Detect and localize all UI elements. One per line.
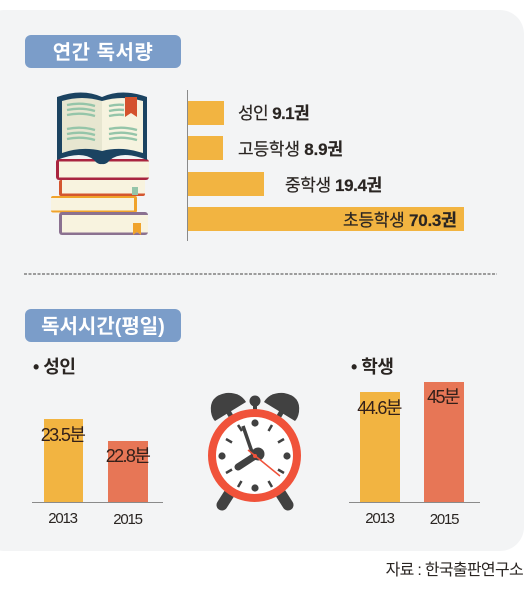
bar: students 2015: 45분 <box>427 387 460 407</box>
icon: books stack with open book <box>51 92 149 235</box>
subheading: students: • 학생 <box>351 357 393 377</box>
bar: high school <box>188 136 343 160</box>
subheading: adults: • 성인 <box>33 357 75 377</box>
bar: adults 2013: 2013 <box>48 510 78 527</box>
heading: annual reading: 연간 독서량 <box>53 41 153 64</box>
book: top red <box>56 159 149 180</box>
bar: middle school: 중학생 19.4권 <box>285 176 382 195</box>
bar chart: students <box>349 382 480 528</box>
book: purple <box>59 212 148 235</box>
heading: reading time on weekdays <box>25 309 181 342</box>
bar: adults 2015: 22.8분 <box>106 446 150 466</box>
icon: alarm clock <box>211 393 299 505</box>
bar: elementary: 초등학생 70.3권 <box>343 211 457 230</box>
heading: reading time on weekdays: 독서시간(평일) <box>41 315 165 338</box>
bar: adults 2015: 2015 <box>113 511 143 528</box>
heading: annual reading <box>25 35 181 68</box>
bar: students 2013: 2013 <box>365 510 395 527</box>
bar: adults 2013: 23.5분 <box>41 425 85 445</box>
bar: students 2015: 2015 <box>430 511 459 528</box>
book: orange-red <box>59 180 145 196</box>
bar chart: annual reading <box>187 90 464 241</box>
bar: adults 2013 <box>41 419 85 527</box>
bar: students 2013 <box>357 392 402 527</box>
source note: 자료 : 한국출판연구소 <box>386 561 523 579</box>
bar: students 2015 <box>424 382 464 528</box>
book: yellow <box>51 196 137 212</box>
bar: high school: 고등학생 8.9권 <box>238 140 343 159</box>
bar: students 2013: 44.6분 <box>357 398 402 418</box>
bar: elementary <box>188 207 464 231</box>
book: open navy <box>57 92 147 164</box>
bar: adult: 성인 9.1권 <box>238 104 309 123</box>
bar: adults 2015 <box>106 441 150 528</box>
bar: middle school <box>188 172 382 196</box>
bar: adult <box>188 101 309 125</box>
bar chart: adults <box>32 419 163 528</box>
